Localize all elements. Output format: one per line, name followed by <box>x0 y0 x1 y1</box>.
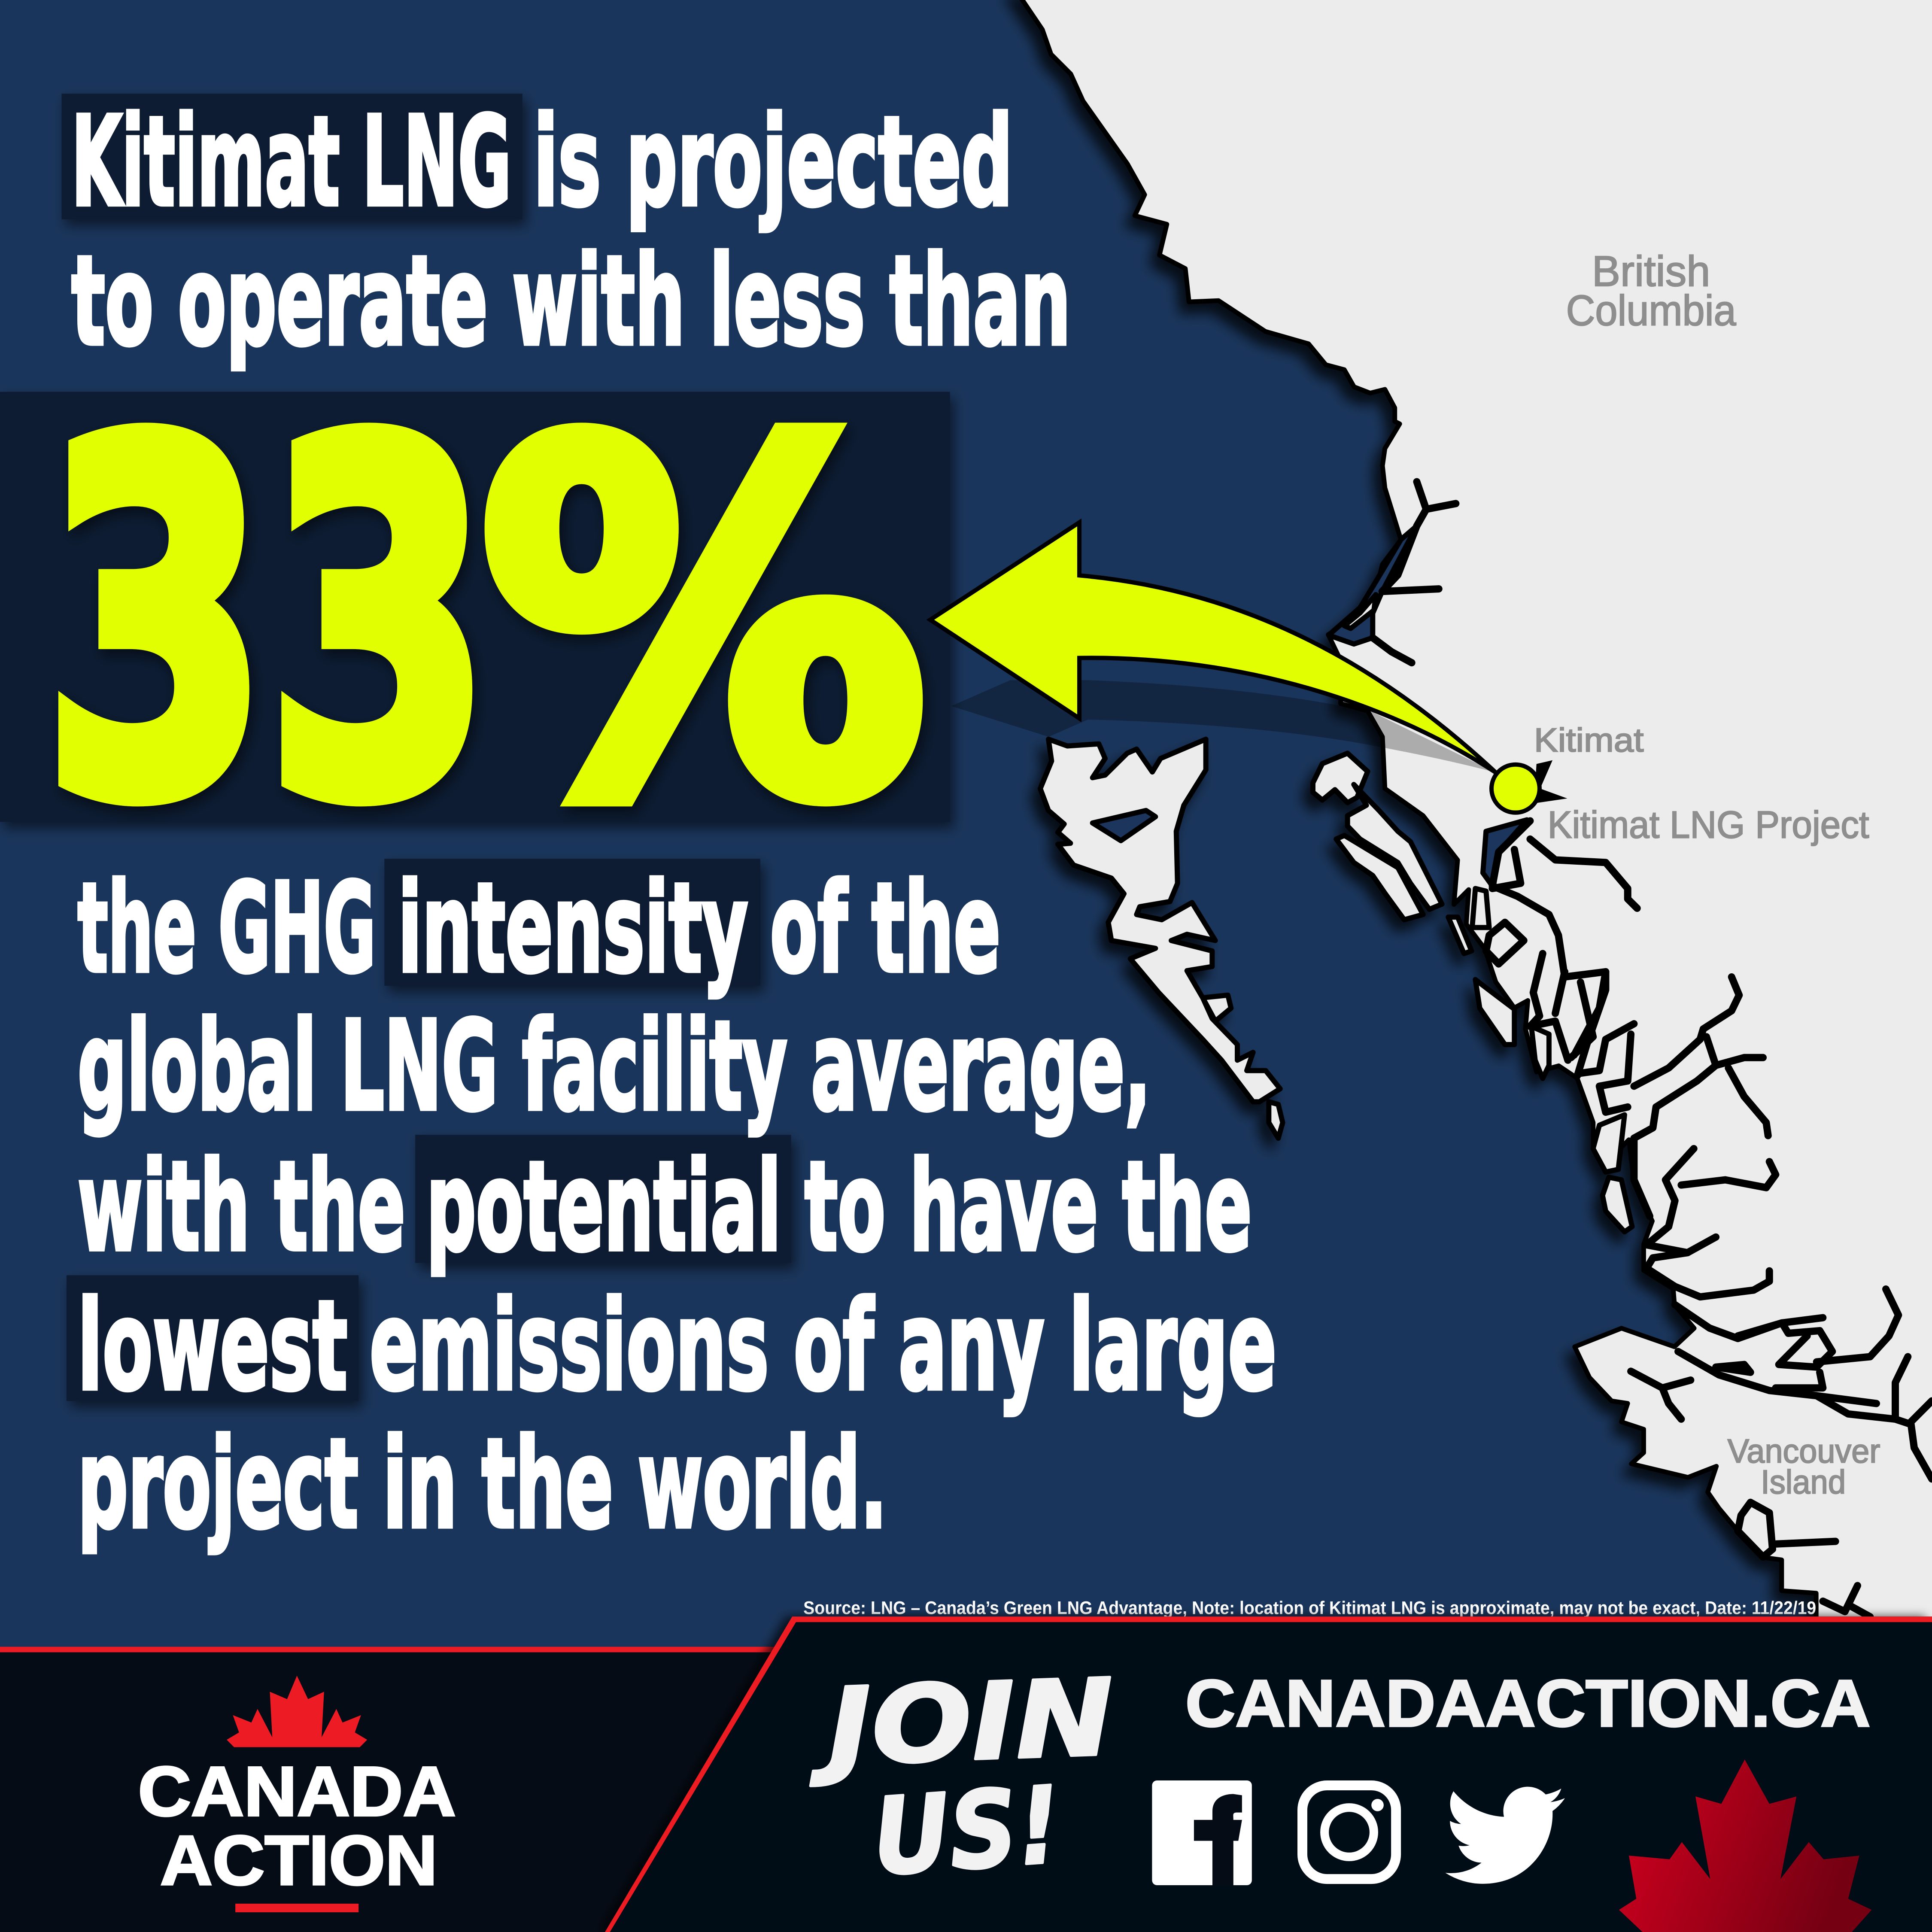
Join Us brush lettering <box>806 1656 1116 1900</box>
map label: Vancouver Island: Island <box>1761 1464 1846 1501</box>
swirl island <box>1313 753 1368 803</box>
island <box>1531 1027 1549 1078</box>
Canada Action logo: ACTION <box>160 1821 437 1900</box>
island <box>1593 1115 1625 1172</box>
heading bottom: of the <box>770 857 1000 1000</box>
island <box>1448 917 1472 954</box>
heading bottom <box>78 857 1276 1556</box>
fjord spikes beside Kitimat <box>1534 760 1567 803</box>
icon: Instagram <box>1302 1785 1396 1879</box>
Join Us brush lettering: US! <box>869 1764 1064 1900</box>
fjord strokes <box>1373 482 1932 1617</box>
heading top: is projected <box>534 90 1013 234</box>
curved arrow from Kitimat to 33% <box>930 522 1496 772</box>
mainland and Vancouver Island <box>1014 0 1932 1639</box>
icon: Facebook <box>1152 1780 1252 1885</box>
map label: Kitimat: Kitimat <box>1534 722 1643 759</box>
Haida Gwaii <box>1040 739 1280 1102</box>
arrow shadow <box>951 680 1496 772</box>
heading bottom: lowest <box>78 1274 347 1418</box>
highlight boxes <box>0 94 950 1401</box>
island west of Kitimat <box>1348 784 1442 909</box>
website: CANADAACTION.CA <box>1185 1666 1871 1741</box>
small island south of Haida Gwaii <box>1269 1102 1283 1138</box>
map label: Kitimat LNG Project: Kitimat LNG Project <box>1548 803 1869 846</box>
heading bottom: potential <box>426 1135 781 1279</box>
footer left band <box>0 1647 789 1932</box>
map label: Vancouver Island <box>1728 1433 1880 1501</box>
big number 33%: % <box>480 345 927 902</box>
heading bottom: the GHG <box>78 857 376 1000</box>
map label: British Columbia: Columbia <box>1566 287 1736 335</box>
island <box>1472 889 1489 927</box>
map of the British Columbia coast <box>1014 0 1932 1639</box>
small island east of Haida Gwaii <box>1203 995 1231 1021</box>
footer right panel <box>605 1616 1932 1932</box>
heading top: to operate with less than <box>71 230 1071 373</box>
map label: British Columbia: British <box>1592 247 1710 295</box>
heading bottom: project in the world. <box>78 1413 887 1556</box>
northern small island <box>1344 595 1376 629</box>
Canada Action logo <box>138 1676 456 1912</box>
heading bottom: emissions of any large <box>370 1274 1276 1418</box>
heading top <box>71 90 1071 373</box>
source note: Source: LNG – Canada’s Green LNG Advantage, Note: location of Kitimat LNG is approximate, may not be exact, Date: 11/22/19 <box>803 1598 1816 1619</box>
Kitimat location dot <box>1492 765 1540 813</box>
icon: large dark red maple leaf <box>1619 1759 1871 1932</box>
Haida Gwaii notch <box>1093 811 1155 841</box>
big number 33%: 33 <box>44 345 490 902</box>
map label: British Columbia <box>1566 247 1736 335</box>
heading bottom: intensity <box>398 857 748 1000</box>
map label: Vancouver Island: Vancouver <box>1728 1433 1880 1470</box>
Kitimat channel <box>1483 820 1527 886</box>
heading top: Kitimat LNG <box>71 90 511 234</box>
heading bottom: with the <box>78 1135 405 1279</box>
icon: red maple leaf <box>227 1676 367 1747</box>
heading bottom: to have the <box>805 1135 1252 1279</box>
island <box>1603 1177 1632 1232</box>
outer island <box>1336 835 1423 920</box>
island <box>1475 980 1514 1045</box>
Canada Action logo: CANADA <box>138 1752 456 1831</box>
northern channel <box>1329 526 1417 644</box>
islands and fjords <box>1040 482 1932 1617</box>
Join Us brush lettering: JOIN <box>806 1656 1116 1790</box>
icon: Twitter bird <box>1445 1787 1565 1884</box>
